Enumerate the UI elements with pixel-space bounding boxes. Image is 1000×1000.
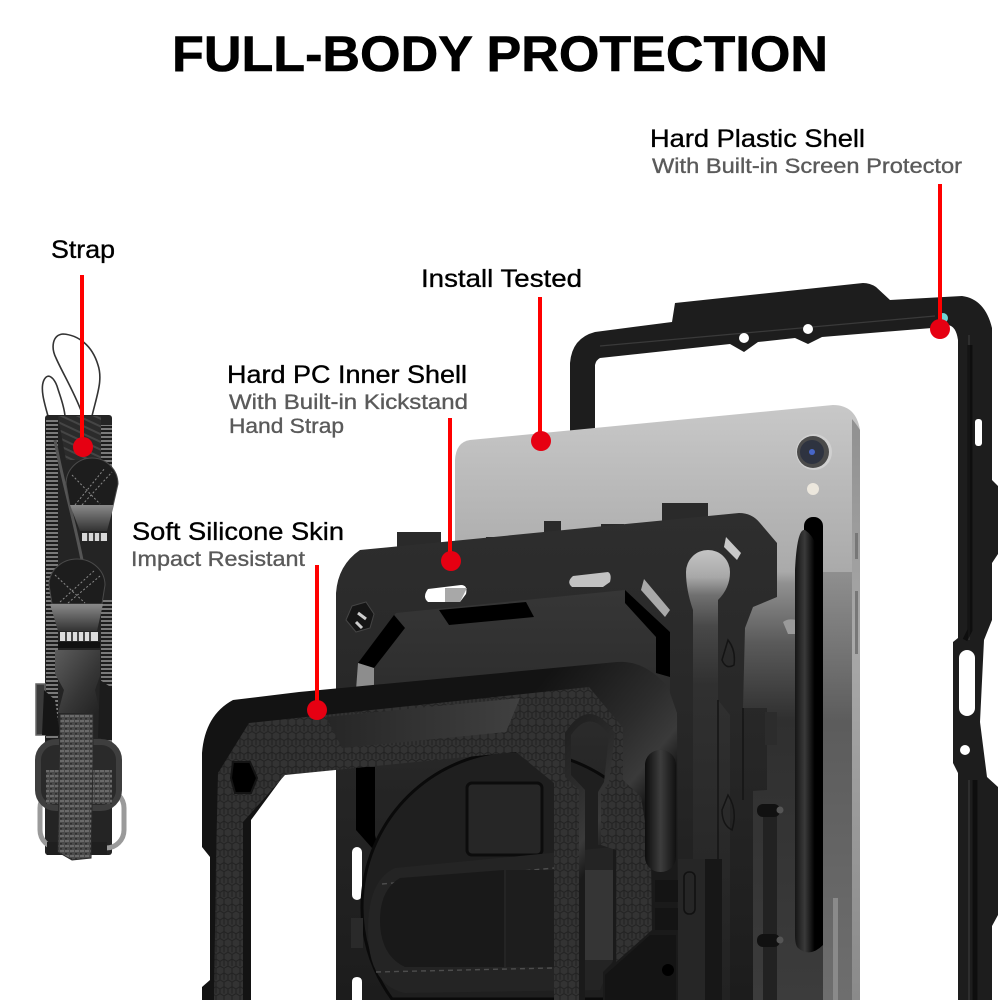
callout: soft silicone skin: Impact Resistant — [131, 548, 305, 571]
panel: strap accessory — [36, 334, 124, 860]
panel: tablet back — [455, 405, 860, 1000]
panel: hard PC inner shell — [336, 503, 784, 1000]
camera — [796, 434, 832, 470]
side capsule — [645, 750, 676, 872]
callout: hard plastic shell: Hard Plastic Shell — [650, 125, 865, 153]
callout: strap: Strap — [51, 236, 115, 264]
square mount — [467, 783, 542, 855]
callout: hard plastic shell — [650, 125, 962, 339]
title: FULL-BODY PROTECTION — [172, 26, 828, 82]
side buttons — [605, 880, 678, 1000]
centre inset — [326, 698, 520, 748]
callout: hard PC inner shell: Hand Strap — [229, 415, 344, 438]
callout: install tested: Install Tested — [421, 265, 582, 293]
kickstand plate — [356, 590, 670, 857]
stylus pen — [795, 517, 823, 952]
flash — [807, 483, 819, 495]
right hinge rod — [757, 712, 784, 1000]
buckle — [36, 650, 112, 740]
callout: hard PC inner shell: Hard PC Inner Shell — [227, 361, 467, 389]
side block — [678, 859, 722, 1000]
rotating disc — [362, 751, 674, 999]
callout: strap — [51, 236, 115, 457]
top clips — [397, 503, 708, 552]
string loops — [42, 334, 100, 416]
quilted patch lower — [49, 559, 105, 648]
callout: hard plastic shell: With Built-in Screen Protector — [652, 155, 962, 178]
honeycomb face — [214, 687, 652, 1000]
cyan lens glint — [938, 313, 948, 323]
hand strap — [351, 847, 613, 993]
hex corner window — [231, 762, 257, 793]
callout: soft silicone skin: Soft Silicone Skin — [132, 518, 344, 546]
panel: soft silicone skin — [202, 662, 722, 1000]
strap tail — [58, 714, 93, 860]
shell body — [336, 513, 777, 1000]
quilted patch upper — [66, 458, 118, 541]
callout: soft silicone skin — [131, 518, 344, 720]
keyhole cutout — [686, 550, 730, 1000]
callout: hard PC inner shell: With Built-in Kickstand — [229, 391, 468, 414]
callout: install tested — [421, 265, 582, 451]
ring dark — [38, 742, 119, 808]
ring silver — [40, 790, 124, 855]
callout: hard PC inner shell — [227, 361, 468, 571]
hex screw — [346, 602, 374, 632]
shell slots — [352, 537, 741, 1000]
panel: hard plastic shell — [570, 283, 998, 1000]
webbing body — [45, 415, 112, 855]
screw holes and slots — [739, 324, 982, 755]
right rail pieces — [718, 640, 743, 870]
skin outer rim — [202, 662, 678, 1000]
